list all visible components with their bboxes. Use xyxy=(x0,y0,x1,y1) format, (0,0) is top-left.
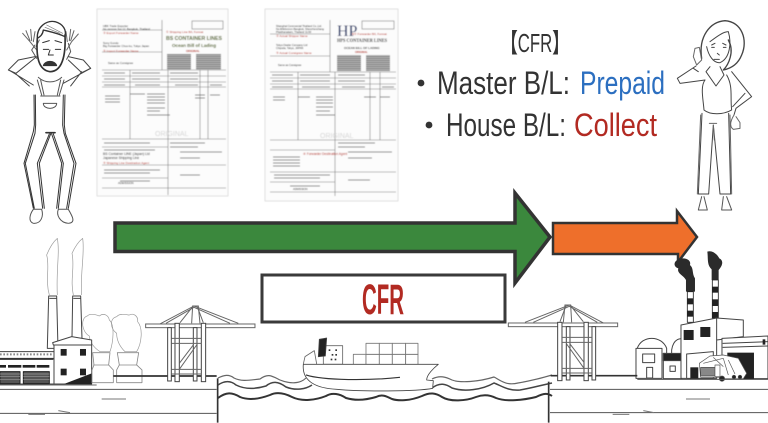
panel: house bill of lading document xyxy=(265,9,398,201)
text: house B/L header: OCEAN BILL OF LADING xyxy=(344,46,380,50)
text: master B/L parties: Sony Gondo xyxy=(103,41,119,45)
icon: HPS logo: HP xyxy=(337,23,358,40)
text: master B/L parties: Big Forwarder Chuo-ku, Tokyo Japan xyxy=(103,44,150,48)
icon: man's hands xyxy=(23,29,78,50)
text: master B/L header: ① Shipping Line B/L Format xyxy=(166,30,203,34)
icon: black smoke xyxy=(675,251,722,292)
text block: master B/L prepaid: Prepaid xyxy=(580,65,665,101)
text: house B/L header: ① Forwarder B/L Format xyxy=(354,32,387,36)
icon: containers xyxy=(353,343,418,365)
text: house B/L header xyxy=(337,32,387,54)
text: master B/L parties: ④ Shipping Line Destination Agent xyxy=(103,161,149,165)
text: master B/L parties: Japanese Shipping Line xyxy=(103,156,139,160)
panel: house bill of lading document: ORIGINAL xyxy=(320,133,354,140)
icon: woman's top xyxy=(702,67,752,115)
text: master B/L parties xyxy=(103,24,150,185)
icon: man's arms xyxy=(8,57,91,86)
icon: left port crane xyxy=(146,306,255,382)
icon: woman's head and hair xyxy=(701,21,744,70)
icon: man's head xyxy=(32,21,71,72)
text: house B/L parties xyxy=(276,24,347,191)
icon: container ship xyxy=(303,338,438,391)
text: master B/L header xyxy=(166,30,223,53)
text: master B/L parties: No.mmmm Soi 12, Bangkok, Thailand xyxy=(103,27,150,31)
text block: house B/L collect: Collect xyxy=(574,107,657,143)
text: master B/L parties: ③ Import Forwarder Name xyxy=(103,49,139,53)
icon: woman's hand on hip xyxy=(731,115,740,129)
text: master B/L parties: ② Export Forwarder Name xyxy=(103,31,139,35)
panel: CFR label box: CFR xyxy=(362,276,404,324)
icon: white smoke plumes xyxy=(47,238,141,352)
text: house B/L header: HPS CONTAINER LINES xyxy=(337,39,387,44)
text: house B/L parties: ② Actual Shipper Name xyxy=(276,34,308,38)
panel: master bill of lading document: ORIGINAL xyxy=(155,131,189,138)
text block: house B/L collect xyxy=(426,107,657,143)
icon: woman's trousers xyxy=(697,113,732,210)
icon: man's shoes xyxy=(30,209,73,223)
arrow: green master B/L arrow xyxy=(115,193,550,283)
arrow: orange house B/L arrow xyxy=(553,211,697,262)
text block: master B/L prepaid: Master B/L: xyxy=(437,65,570,101)
text: master B/L parties: HBK Trade Exporter xyxy=(103,24,128,28)
icon: right factory xyxy=(636,318,768,379)
text: house B/L parties: ③ Actual Consignee Name xyxy=(276,51,312,55)
text: house B/L parties: Same as Consignee xyxy=(278,63,302,67)
text: master B/L header: BS CONTAINER LINES xyxy=(166,36,223,42)
icon: ground lines xyxy=(549,376,768,423)
icon: cooling towers xyxy=(92,353,142,383)
icon: bridge xyxy=(303,338,343,364)
text: house B/L parties: Phatthanakarn, Thailand 11/20 xyxy=(276,30,312,34)
panel: right consignee thinking woman xyxy=(677,21,752,210)
text: house B/L header: ORIGINAL xyxy=(355,50,368,54)
icon: hull xyxy=(303,364,438,391)
icon: left factory building xyxy=(0,337,92,384)
panel: sea and waves xyxy=(218,375,552,400)
icon: woman's raised arm xyxy=(677,47,705,83)
text: house B/L parties: No.Mhkbmmm Bangkok, Shenzhenchang xyxy=(276,27,324,31)
text: house B/L parties: ④ Forwarder Destination Agent xyxy=(303,152,347,156)
icon: striped chimneys xyxy=(687,280,718,322)
icon: garbage truck xyxy=(699,355,747,381)
text: house B/L parties: Tokyo Dealer Company Ltd xyxy=(276,43,308,47)
text: house B/L parties: Chiyoda, Tokyo, JAPAN xyxy=(276,46,303,50)
panel: import side land and factory xyxy=(549,251,768,423)
text: house B/L parties: Shanghai Commercial Thailand Co.,Ltd. xyxy=(276,24,322,28)
icon: chimneys xyxy=(47,296,82,348)
panel: master bill of lading document xyxy=(97,9,228,196)
text: master B/L parties: Same as Consignee xyxy=(108,61,134,65)
icon: HPS logo: s xyxy=(352,31,354,36)
icon: ground lines xyxy=(0,376,218,423)
text: master B/L parties: BS Container LINE (Japan) Ltd xyxy=(103,152,150,156)
text: house B/L parties: ADMISSION xyxy=(293,187,308,191)
icon: right port crane xyxy=(508,305,618,381)
panel: export side land and factory xyxy=(0,238,218,423)
text: master B/L parties: ADMISSION xyxy=(118,181,134,185)
text: master B/L header: ORIGINAL xyxy=(186,49,200,53)
text block: master B/L prepaid xyxy=(418,65,665,101)
title: CFR heading: 【CFR】 xyxy=(501,28,569,58)
panel: CFR label box xyxy=(262,275,505,324)
panel: left shipper worried man xyxy=(8,21,91,223)
text block: house B/L collect: House B/L: xyxy=(446,107,566,143)
icon: man's overalls xyxy=(24,77,76,208)
text: master B/L header: Ocean Bill of Lading xyxy=(172,43,216,48)
